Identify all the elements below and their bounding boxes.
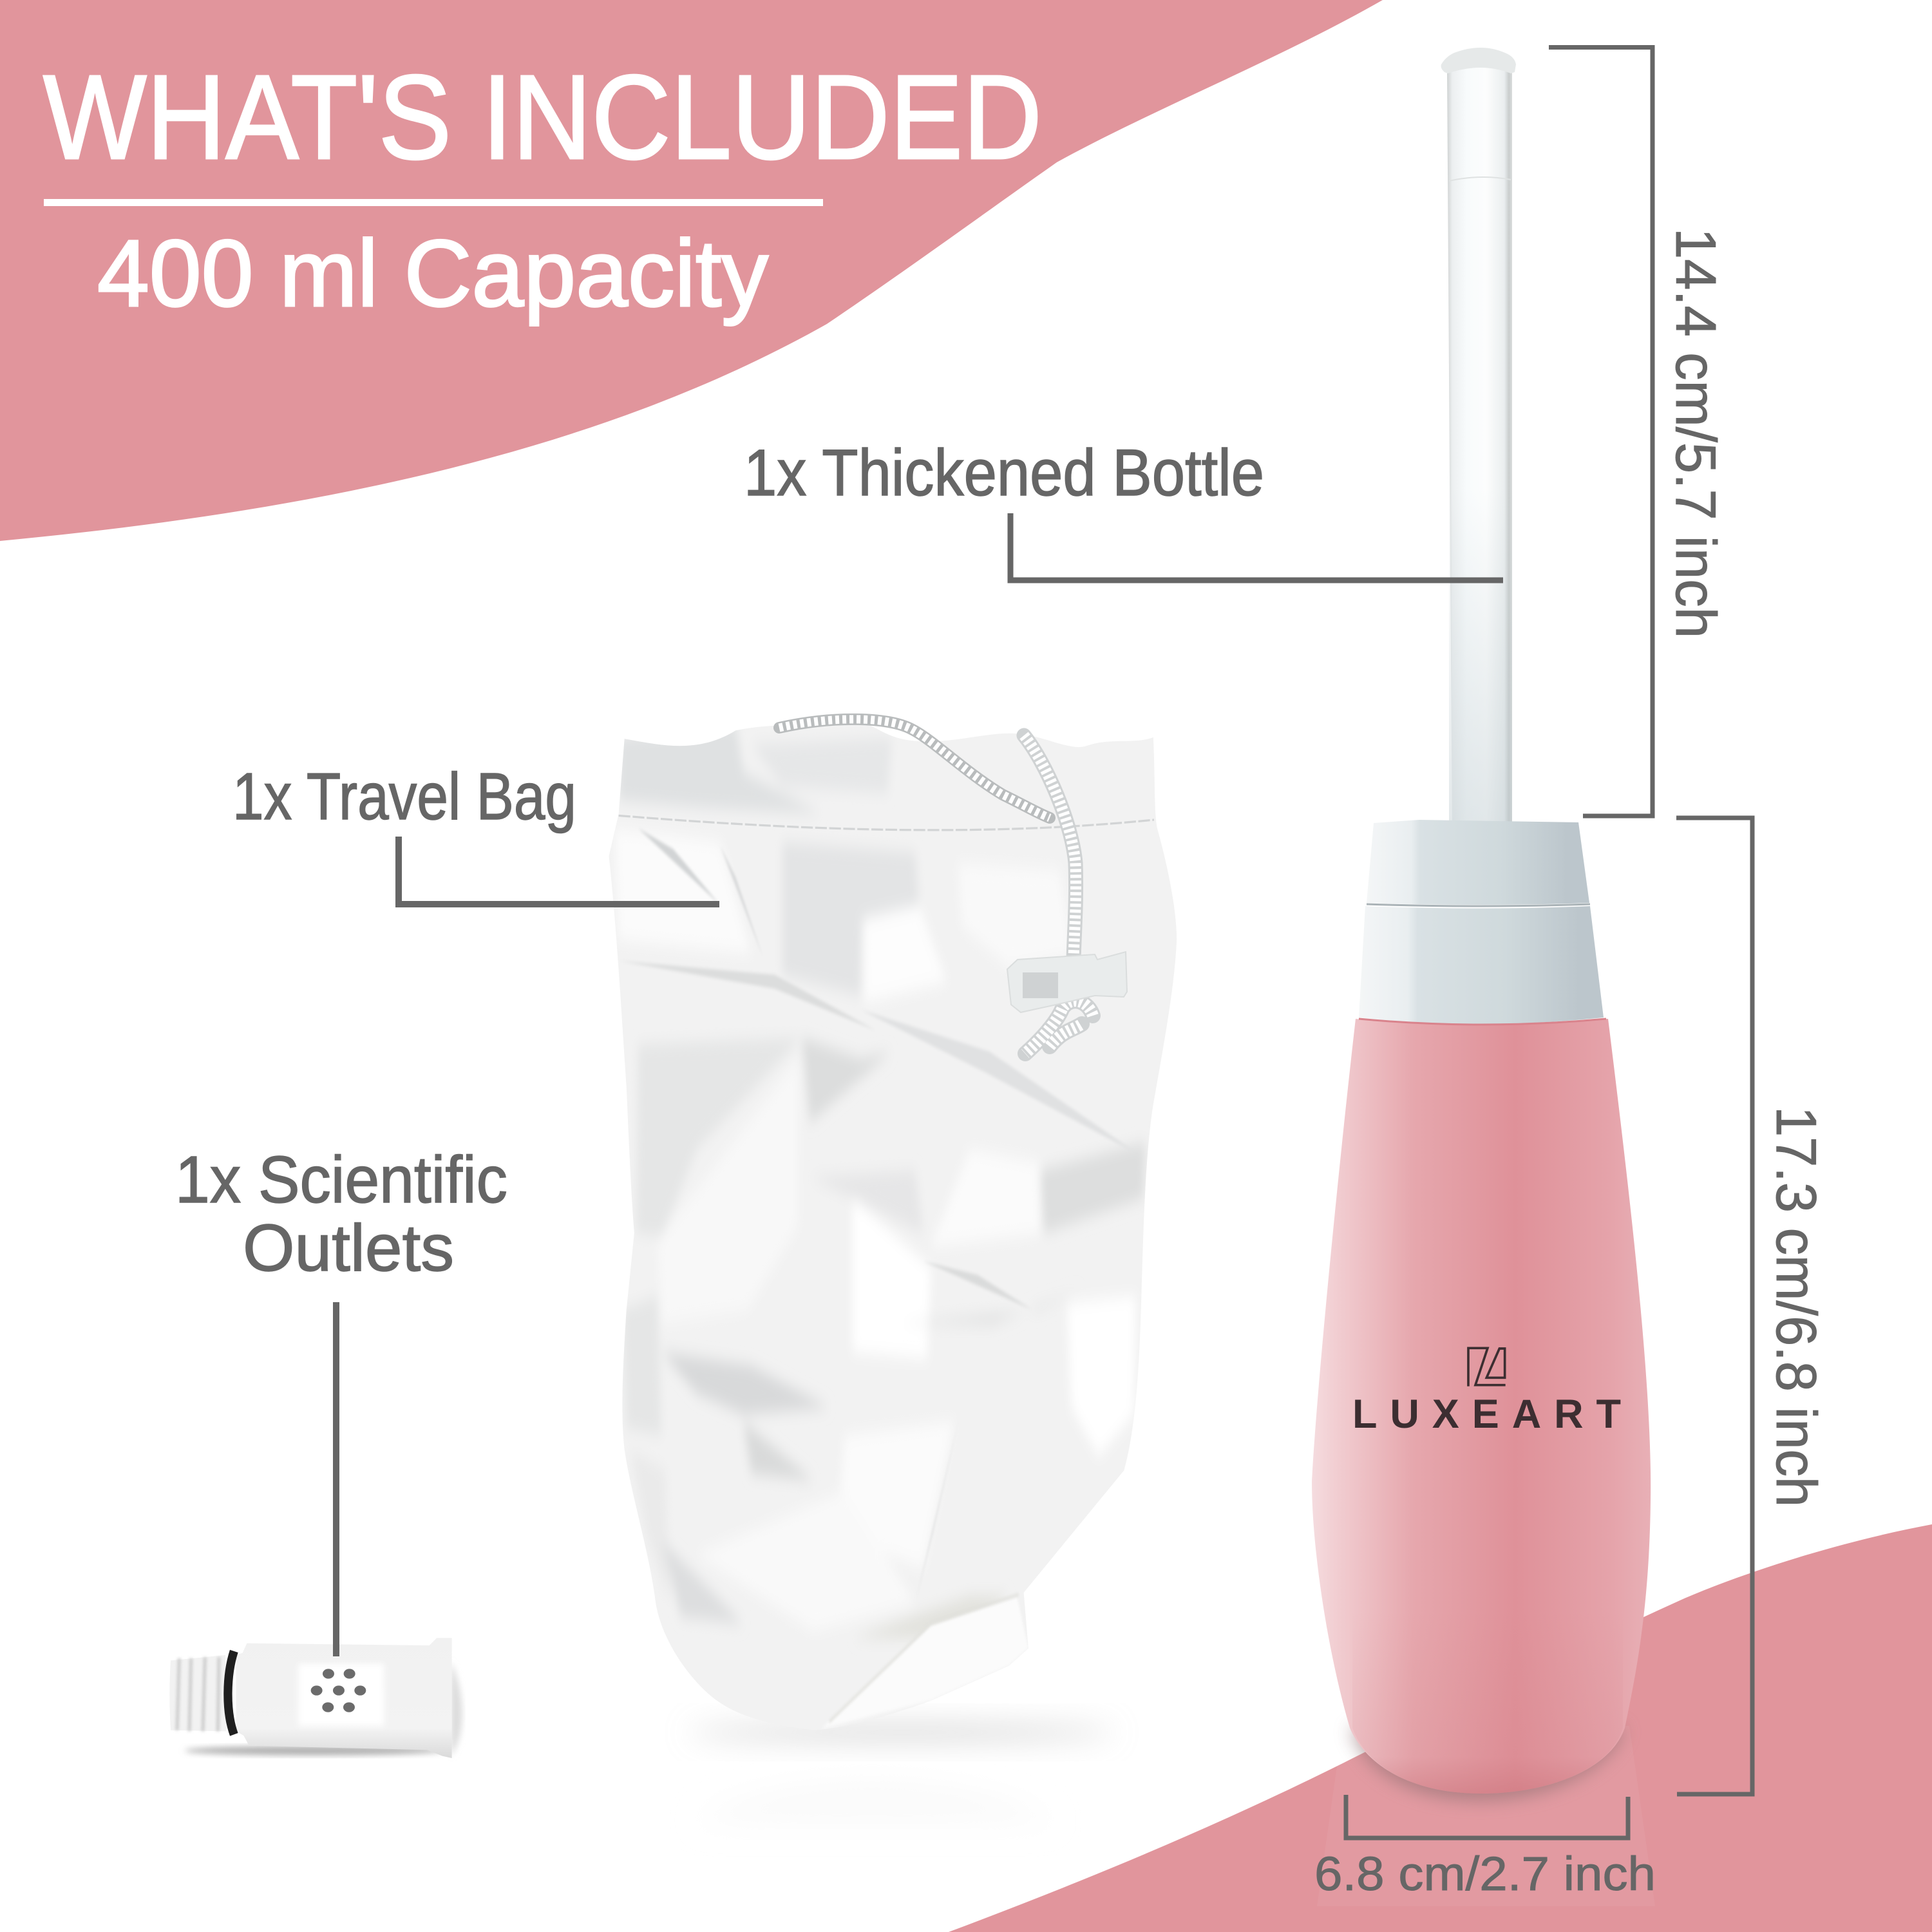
outlet threads [169, 1655, 227, 1731]
bag shadow [689, 1727, 1114, 1823]
illustration: scientific outlet [169, 1638, 462, 1758]
background: bottom pink wave [949, 1524, 1932, 1932]
bottle nozzle tube [1441, 48, 1516, 823]
outlet o-ring [228, 1651, 234, 1734]
subtitle: capacity: 400 ml Capacity [97, 221, 768, 327]
bottle upper cap [1367, 820, 1589, 905]
illustration: bottle [1312, 48, 1651, 1794]
bag cord toggle [1007, 952, 1127, 1012]
bottle shadow and reflection [1317, 1726, 1655, 1906]
dimension bracket: width [1346, 1795, 1628, 1838]
callout line: bottle [1010, 513, 1503, 580]
outlet barrel [236, 1638, 452, 1758]
title rule [44, 199, 823, 206]
bottle body [1312, 1019, 1651, 1794]
label: thickened bottle: 1x Thickened Bottle [744, 436, 1264, 509]
dimension text: width: 6.8 cm/2.7 inch [1314, 1847, 1656, 1900]
bag drawstring cord [779, 719, 1093, 1054]
label: scientific outlets: Outlets [243, 1211, 454, 1285]
dimension text: body height: 17.3 cm/6.8 inch [1765, 1106, 1828, 1507]
title: WHAT'S INCLUDED [43, 51, 1042, 184]
background: top pink wave [0, 0, 1383, 541]
logo mark [1468, 1348, 1506, 1387]
callout line: bag [399, 837, 719, 904]
bottle lower cap [1359, 906, 1604, 1024]
label: travel bag: 1x Travel Bag [232, 759, 576, 833]
label: scientific outlets [175, 1142, 507, 1285]
label: scientific outlets: 1x Scientific [175, 1142, 507, 1217]
dimension bracket: tube height [1549, 48, 1653, 816]
bottle cap seam [1367, 904, 1590, 906]
outlet holes [311, 1669, 366, 1712]
dimension text: tube height: 14.4 cm/5.7 inch [1664, 228, 1728, 638]
dimension bracket: body height [1676, 818, 1752, 1794]
brand name: LUXEART [1352, 1392, 1621, 1437]
callout line: outlet [333, 1302, 339, 1656]
illustration: travel bag [609, 719, 1177, 1730]
